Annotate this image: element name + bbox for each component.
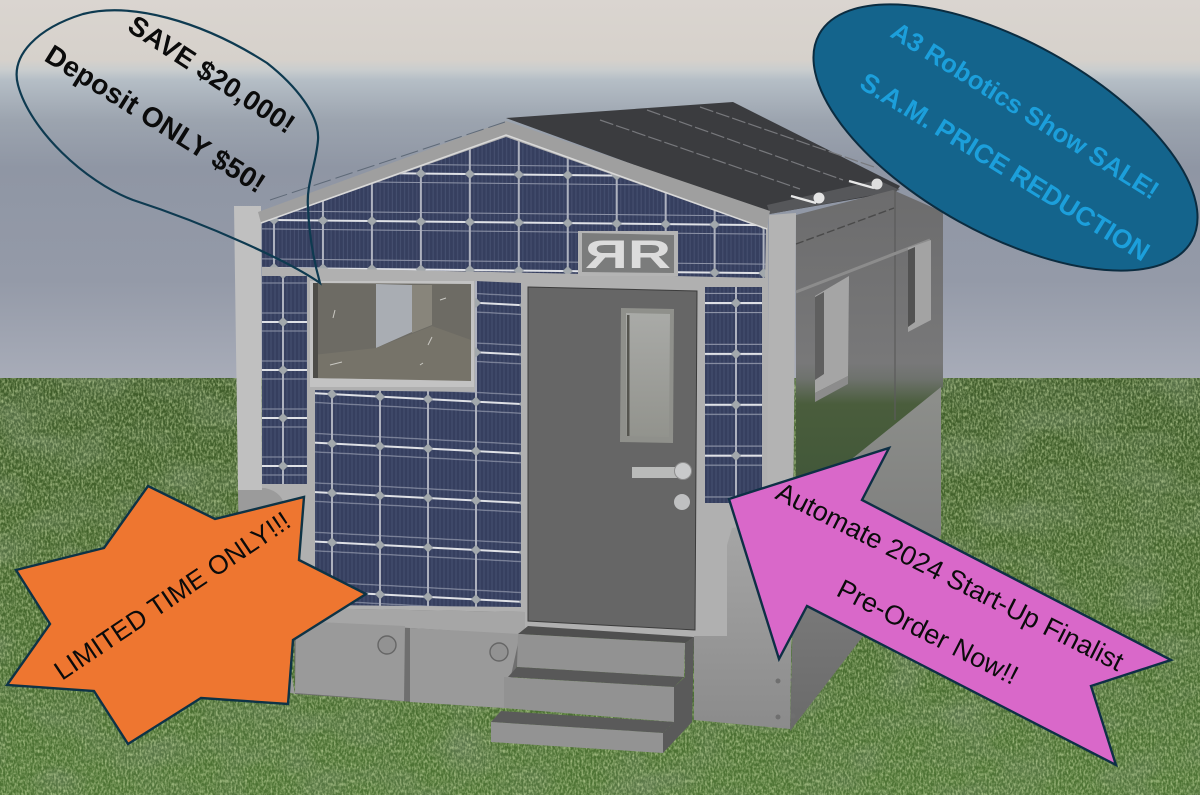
gable frame xyxy=(258,121,770,229)
roof xyxy=(506,102,900,214)
right post xyxy=(767,213,796,525)
arrow top line: Automate 2024 Start-Up Finalist xyxy=(771,477,1129,677)
lower right front base xyxy=(694,520,793,729)
grass lawn xyxy=(0,378,1200,795)
price reduction line: S.A.M. PRICE REDUCTION xyxy=(855,67,1155,267)
cabinet two xyxy=(410,628,520,708)
left solar column xyxy=(262,276,307,484)
lower left front base xyxy=(238,488,295,694)
bubble headline: SAVE $20,000! xyxy=(123,9,301,140)
door handle xyxy=(632,462,692,480)
cabinet one xyxy=(295,621,405,701)
sky background xyxy=(0,0,1200,400)
logo badge: ЯR xyxy=(585,233,671,277)
side wall xyxy=(796,190,943,505)
door window xyxy=(620,308,674,443)
center solar panel xyxy=(315,281,521,607)
star text: LIMITED TIME ONLY!!! xyxy=(49,506,296,686)
front window xyxy=(310,281,474,387)
side wall details xyxy=(796,190,930,420)
lower side wall xyxy=(790,387,941,731)
door lock xyxy=(674,494,690,510)
left post xyxy=(234,206,262,490)
gable panels xyxy=(262,137,766,278)
orange star: limited time xyxy=(7,486,366,744)
side window right xyxy=(908,240,931,332)
bubble deposit line: Deposit ONLY $50! xyxy=(40,39,271,199)
base strip xyxy=(294,608,525,708)
logo badge xyxy=(578,231,678,277)
side window left xyxy=(815,276,849,402)
sale headline: A3 Robotics Show SALE! xyxy=(886,17,1164,205)
pink arrow: finalist xyxy=(729,448,1171,765)
tiny house xyxy=(234,102,943,753)
steps xyxy=(491,626,694,753)
right solar column xyxy=(705,287,762,503)
base bolts xyxy=(776,678,796,720)
speech bubble: save offer xyxy=(17,9,320,283)
arrow bottom line: Pre-Order Now!! xyxy=(832,574,1023,691)
door xyxy=(528,287,697,630)
front wall xyxy=(262,128,768,640)
roof corner bolts xyxy=(791,178,882,204)
ellipse badge: show sale xyxy=(773,0,1200,325)
